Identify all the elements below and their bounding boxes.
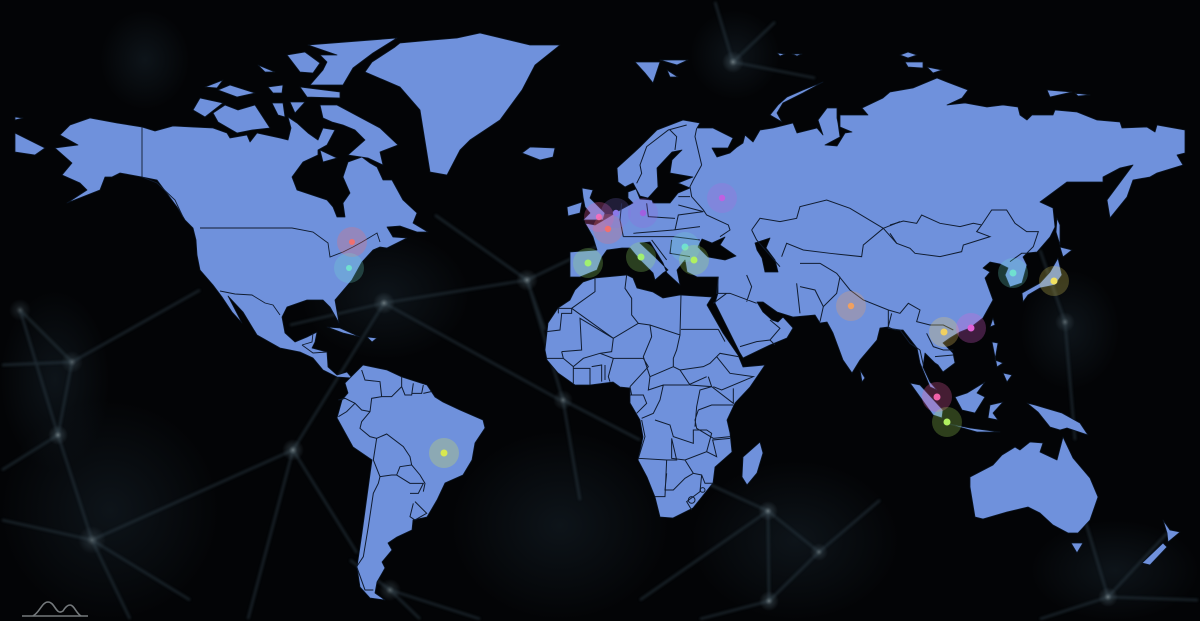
country borders: Africa and Arabia xyxy=(547,275,800,510)
Caribbean xyxy=(327,327,360,337)
Madagascar xyxy=(742,442,763,485)
marker: UK xyxy=(584,202,614,232)
Wrangel island wrap xyxy=(15,117,23,120)
marker: Indonesia xyxy=(932,407,962,437)
country borders: East Asia xyxy=(890,210,1038,262)
Australia xyxy=(970,437,1098,533)
North America xyxy=(55,117,428,378)
Great Britain xyxy=(582,188,605,220)
Sakhalin xyxy=(1056,218,1060,245)
Sumatra xyxy=(910,383,943,418)
marker: Hong Kong xyxy=(956,313,986,343)
Borneo xyxy=(955,382,985,413)
marker: Romania xyxy=(670,232,700,262)
marker: Turkey xyxy=(679,245,709,275)
marker: India xyxy=(836,291,866,321)
country borders: Europe and Central Asia xyxy=(620,125,900,267)
Hokkaido xyxy=(1060,247,1072,257)
Philippines xyxy=(992,342,1003,367)
New Guinea xyxy=(1027,403,1088,435)
South America xyxy=(337,365,485,600)
marker: Spain xyxy=(573,248,603,278)
country borders: South Asia xyxy=(800,263,953,365)
country borders: North America xyxy=(142,127,380,353)
Eurasia xyxy=(570,78,1185,390)
New Zealand xyxy=(1142,543,1167,565)
marker: Russia xyxy=(707,183,737,213)
Africa xyxy=(545,275,765,518)
Greenland xyxy=(365,33,560,175)
Iceland xyxy=(522,147,555,160)
marker: Brazil xyxy=(429,438,459,468)
marker: Korea xyxy=(998,258,1028,288)
marker: Italy xyxy=(626,242,656,272)
country borders: South America xyxy=(338,370,431,590)
marker: Singapore xyxy=(922,382,952,412)
marker: France xyxy=(593,214,623,244)
Java xyxy=(945,423,1000,432)
logo xyxy=(22,602,88,616)
marker: Canada xyxy=(337,227,367,257)
Arctic islands xyxy=(193,98,223,117)
Tasmania xyxy=(1071,543,1083,553)
Ireland xyxy=(567,202,582,216)
Arctic Eurasian islands xyxy=(777,53,785,56)
marker: Japan xyxy=(1039,266,1069,296)
Sri Lanka xyxy=(860,370,865,382)
Taiwan xyxy=(990,318,995,327)
Honshu xyxy=(1022,258,1062,302)
marker: Germany xyxy=(628,198,658,228)
data markers xyxy=(334,183,1069,468)
Svalbard xyxy=(635,62,660,83)
Novaya Zemlya xyxy=(770,82,823,122)
marker: Vietnam xyxy=(929,317,959,347)
Sulawesi xyxy=(988,402,1003,420)
far-east Russia wrap xyxy=(15,133,45,155)
marker: US east xyxy=(334,253,364,283)
marker: Netherlands xyxy=(601,198,631,228)
